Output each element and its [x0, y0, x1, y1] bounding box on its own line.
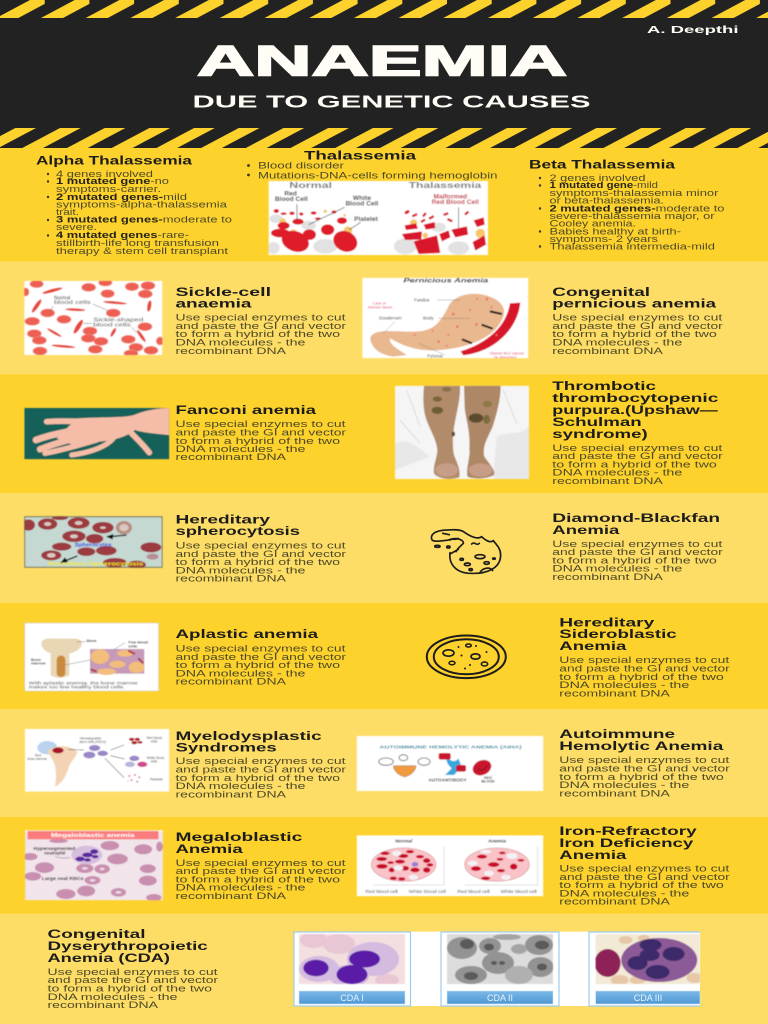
list: beta thalassemia: symptoms-thalassemia minor: [550, 188, 720, 199]
image: stomach diagram: Lack of: [373, 300, 387, 305]
bullet markers: [47, 173, 49, 237]
list: alpha thalassemia: 4 mutated genes -rare-: [56, 230, 189, 241]
text: description: and paste the GI and vector: [552, 321, 724, 332]
image: AIHA cartoon: RED: [484, 776, 492, 780]
heading: megaloblastic anemia: Anemia: [176, 844, 244, 856]
text: description: to form a hybrid of the two: [176, 773, 340, 784]
heading: thrombotic thrombocytopenic purpura: Schulman: [552, 417, 642, 429]
text: description: [559, 864, 731, 908]
image: megaloblastic smear: Large oval RBCs: [42, 876, 84, 881]
list: alpha thalassemia: stillbirth-life long transfusion: [56, 238, 219, 249]
panel: aplastic anemia: [24, 623, 347, 691]
panel: iron-refractory iron deficiency anemia: [357, 826, 731, 908]
band: row 6 background: [0, 817, 768, 914]
text: description: recombinant DNA: [176, 677, 287, 688]
card: CDA II: CDA II: [487, 993, 513, 1003]
image: normal vs anemia blood: Red blood cell: [365, 889, 398, 894]
text: description: to form a hybrid of the two: [176, 557, 340, 568]
gallery: CDA micrographs: [294, 932, 703, 1006]
text: description: and paste the GI and vector: [176, 321, 347, 332]
image: normal vs thalassemia blood cells: Thalassemia: [409, 180, 482, 190]
heading: congenital pernicious anemia: [552, 287, 717, 310]
bottom hazard stripes: [0, 128, 768, 148]
text: description: Use special enzymes to cut: [176, 858, 346, 869]
heading: sickle-cell anaemia: anaemia: [176, 298, 252, 310]
image: bone marrow diagram: Bone: [87, 638, 97, 643]
heading: autoimmune hemolytic anemia: Hemolytic Anemia: [559, 741, 724, 753]
heading: autoimmune hemolytic anemia: Autoimmune: [559, 729, 675, 741]
heading: megaloblastic anemia: [176, 832, 303, 856]
image: AIHA cartoon: BLOOD: [481, 779, 495, 783]
list: alpha thalassemia: [56, 169, 232, 257]
text: description: and paste the GI and vector: [552, 547, 724, 558]
image: megaloblastic smear: Hypersegmented: [34, 846, 76, 851]
card: CDA II: [441, 932, 559, 1006]
heading: hereditary sideroblastic anemia: Hereditary: [559, 618, 655, 630]
image: stomach diagram: Pernicious Anemia: [403, 277, 489, 284]
image: spherocytes micrograph: Spherocytes: [75, 543, 112, 549]
image: bone marrow diagram: Bone: [31, 657, 42, 662]
text: description: DNA molecules - the: [48, 992, 178, 1003]
text: description: recombinant DNA: [559, 688, 671, 699]
list: beta thalassemia: 2 genes involved: [550, 173, 646, 184]
image: hand: [24, 408, 169, 459]
text: description: to form a hybrid of the two: [48, 984, 212, 994]
text: description: [176, 540, 347, 585]
image: normal vs anemia blood: Red blood cell: [457, 889, 490, 894]
text: description: to form a hybrid of the two: [552, 555, 717, 566]
image: normal vs anemia blood: White blood cell: [409, 889, 446, 894]
list: beta thalassemia: symptoms- 2 years: [550, 234, 658, 245]
heading: iron-refractory iron deficiency anemia: Anemia: [559, 850, 627, 862]
text: description: and paste the GI and vector: [176, 549, 347, 560]
text: description: recombinant DNA: [559, 897, 671, 908]
card: CDA III: CDA III: [634, 993, 662, 1003]
band: row 3 background: [0, 493, 768, 603]
image: sickle cells: Sickle-shaped: [93, 318, 144, 324]
text: description: recombinant DNA: [559, 788, 671, 799]
text: description: to form a hybrid of the two: [176, 660, 340, 671]
text: description: [552, 539, 724, 583]
text: description: Use special enzymes to cut: [48, 967, 218, 978]
card: CDA III: [589, 932, 703, 1006]
text: description: Use special enzymes to cut: [559, 655, 730, 666]
image: AIHA cartoon: AUTOANTIBODY: [428, 777, 468, 782]
image: blood cell formation diagram: bone marrow: [27, 757, 47, 761]
text: description: DNA molecules - the: [559, 680, 689, 691]
text: description: [48, 967, 219, 1011]
heading: congenital pernicious anemia: pernicious anemia: [552, 298, 717, 310]
text: description: DNA molecules - the: [552, 338, 682, 348]
image: blood cell formation diagram: Red blood: [147, 736, 162, 740]
image: normal vs anemia blood: [357, 835, 543, 896]
image: blood cell formation diagram: stem cells (HSCs): [79, 740, 106, 744]
list: alpha thalassemia: severe.: [56, 222, 97, 233]
list: beta thalassemia: Thalassemia intermedia-mild: [550, 242, 715, 252]
heading: diamond-blackfan anemia: Anemia: [552, 525, 620, 537]
heading: thrombotic thrombocytopenic purpura: purpura.(Upshaw—: [552, 405, 718, 417]
heading: myelodysplastic syndromes: Syndromes: [176, 742, 277, 754]
band: thalassemia background: [0, 148, 768, 262]
text: description: DNA molecules - the: [176, 338, 306, 348]
list: beta thalassemia: Cooley anemia.: [550, 218, 636, 230]
image: blood cell formation diagram: White blood: [147, 756, 164, 760]
bullet markers: [539, 177, 541, 248]
heading: hereditary spherocytosis: [176, 514, 300, 538]
text: description: recombinant DNA: [176, 346, 287, 357]
panel: myelodysplastic syndromes: [25, 729, 347, 800]
author credit: A. Deepthi: [647, 24, 739, 36]
image: normal vs anemia blood: Anemia: [487, 838, 506, 844]
text: description: Use special enzymes to cut: [176, 756, 346, 767]
list: alpha thalassemia: 2 mutated genes- mild: [56, 192, 187, 203]
heading: alpha thalassemia: Alpha Thalassemia: [36, 156, 193, 168]
text: description: [176, 644, 347, 688]
heading: megaloblastic anemia: Megaloblastic: [176, 832, 303, 844]
image: normal vs thalassemia blood cells: Malformed: [433, 193, 467, 200]
image: stomach diagram: Body: [423, 316, 434, 321]
image: normal vs thalassemia blood cells: Platelet: [354, 216, 379, 223]
panel: thalassemia: [247, 150, 498, 256]
text: description: to form a hybrid of the two: [176, 436, 340, 447]
heading: thrombotic thrombocytopenic purpura: Thrombotic: [552, 381, 657, 393]
image: normal vs thalassemia blood cells: White: [353, 195, 371, 202]
list: alpha thalassemia: trait.: [56, 207, 79, 218]
image: spherocytes micrograph: Hereditary Spherocytosis: [48, 562, 143, 568]
panel: congenital pernicious anemia: [362, 277, 724, 359]
heading: hereditary spherocytosis: spherocytosis: [176, 526, 300, 538]
image: blood cell formation diagram: cells: [151, 759, 158, 763]
text: description: Use special enzymes to cut: [559, 755, 730, 766]
heading: iron-refractory iron deficiency anemia: [559, 826, 698, 862]
image: blood cell formation diagram: cells: [151, 739, 158, 743]
band: row 5 background: [0, 709, 768, 817]
image: normal vs anemia blood: White blood cell: [501, 889, 537, 894]
heading: hereditary sideroblastic anemia: Sideroblastic: [559, 629, 678, 641]
text: description: Use special enzymes to cut: [552, 312, 723, 324]
text: description: Use special enzymes to cut: [176, 312, 346, 324]
list: beta thalassemia: or beta-thalassemia.: [550, 196, 664, 206]
heading: myelodysplastic syndromes: Myelodysplastic: [176, 731, 323, 743]
list: thalassemia: Mutations-DNA-cells forming hemoglobin: [258, 170, 498, 182]
image: blood cell formation diagram: Platelets: [150, 777, 163, 781]
text: description: recombinant DNA: [552, 476, 664, 487]
band: row 7 background: [0, 914, 768, 1024]
text: description: DNA molecules - the: [559, 888, 689, 899]
panel: diamond-blackfan anemia: [431, 513, 724, 583]
image: stomach diagram: Fundus: [414, 298, 430, 303]
text: description: to form a hybrid of the two: [176, 874, 340, 885]
image: stomach diagram: Pylorus: [427, 353, 444, 358]
heading: hereditary sideroblastic anemia: [559, 618, 678, 653]
image: normal vs thalassemia blood cells: Red Blood Cell: [432, 199, 479, 206]
panel: thrombotic thrombocytopenic purpura: [395, 381, 724, 487]
text: description: [176, 419, 347, 463]
text: description: Use special enzymes to cut: [176, 540, 346, 552]
heading: aplastic anemia: Aplastic anemia: [176, 629, 319, 641]
list: alpha thalassemia: 4 genes involved: [56, 169, 153, 180]
list: beta thalassemia: 1 mutated gene -mild: [550, 180, 658, 191]
text: description: Use special enzymes to cut: [176, 644, 346, 654]
text: description: DNA molecules - the: [176, 668, 306, 679]
text: description: and paste the GI and vector: [559, 764, 731, 774]
image: normal vs thalassemia blood cells: Red: [284, 190, 297, 197]
text: description: and paste the GI and vector: [176, 652, 347, 663]
heading: thrombotic thrombocytopenic purpura: thrombocytopenic: [552, 393, 719, 405]
heading: beta thalassemia: Beta Thalassemia: [529, 160, 676, 172]
text: description: recombinant DNA: [552, 572, 664, 583]
text: description: and paste the GI and vector: [48, 975, 219, 986]
panel: autoimmune hemolytic anemia: [357, 729, 731, 799]
panel: congenital dyserythropoietic anemia: [48, 929, 703, 1011]
image: stomach diagram: be absorbed: [494, 354, 516, 359]
image: stomach diagram: [362, 277, 528, 359]
heading: iron-refractory iron deficiency anemia: Iron Deficiency: [559, 838, 694, 850]
image: normal vs thalassemia blood cells: [268, 180, 488, 256]
image: megaloblastic smear: Megaloblastic anemia: [51, 833, 136, 839]
band: row 4 background: [0, 603, 768, 709]
band: row 1 background: [0, 262, 768, 374]
text: description: recombinant DNA: [48, 1000, 159, 1011]
list: alpha thalassemia: symptoms-carrier.: [56, 184, 161, 195]
heading: autoimmune hemolytic anemia: [559, 729, 724, 753]
text: description: DNA molecules - the: [176, 781, 306, 792]
heading: congenital dyserythropoietic anemia: [48, 929, 209, 965]
image: megaloblastic smear: neutrophil: [44, 850, 65, 855]
text: description: DNA molecules - the: [176, 565, 306, 576]
text: description: to form a hybrid of the two: [559, 772, 724, 783]
list: beta thalassemia: Babies healthy at birth-: [550, 226, 681, 238]
band: row 2 background: [0, 374, 768, 493]
text: description: recombinant DNA: [176, 891, 287, 902]
text: description: and paste the GI and vector: [559, 664, 731, 674]
panel: beta thalassemia: [529, 160, 724, 252]
image: megaloblastic smear: [23, 830, 163, 901]
image: bone marrow diagram: marrow: [31, 661, 46, 666]
image: stomach diagram: Vitamin B12 cannot: [489, 351, 525, 356]
heading: myelodysplastic syndromes: [176, 731, 323, 754]
list: thalassemia: Blood disorder: [258, 160, 345, 172]
heading: sickle-cell anaemia: Sickle-cell: [176, 287, 271, 299]
heading: thrombotic thrombocytopenic purpura: syndrome): [552, 429, 648, 441]
list: alpha thalassemia: symptoms-alpha-thalassemia: [56, 200, 228, 210]
image: normal vs thalassemia blood cells: Normal: [289, 180, 332, 190]
text: description: DNA molecules - the: [176, 444, 306, 455]
heading: congenital dyserythropoietic anemia: Anemia (CDA): [48, 953, 170, 965]
text: description: DNA molecules - the: [559, 780, 689, 791]
text: description: recombinant DNA: [176, 574, 287, 585]
text: description: Use special enzymes to cut: [176, 419, 346, 430]
text: description: [176, 858, 347, 902]
icon: ruptured cell: [431, 530, 501, 573]
image: bone marrow diagram: cells: [128, 643, 138, 648]
heading: congenital dyserythropoietic anemia: Dyserythropoietic: [48, 941, 209, 953]
image: stomach diagram: intrinsic factor: [368, 304, 393, 309]
heading: congenital pernicious anemia: Congenital: [552, 287, 650, 299]
text: description: and paste the GI and vector: [176, 428, 347, 438]
text: description: DNA molecules - the: [176, 883, 306, 894]
text: description: and paste the GI and vector: [559, 872, 731, 883]
image: blood cell formation diagram: [25, 729, 169, 792]
image: sickle cells: [23, 279, 164, 357]
text: description: [559, 755, 731, 799]
list: beta thalassemia: severe-thalassemia major, or: [550, 211, 716, 222]
image: sickle cells: Normal: [54, 295, 70, 301]
text: description: Use special enzymes to cut: [552, 539, 723, 550]
heading: thalassemia: Thalassemia: [304, 150, 417, 162]
list: alpha thalassemia: 1 mutated gene -no: [56, 176, 169, 187]
list: thalassemia: [247, 160, 498, 182]
text: description: Use special enzymes to cut: [552, 443, 723, 454]
heading: sickle-cell anaemia: [176, 287, 271, 310]
panel: hereditary sideroblastic anemia: [427, 618, 731, 699]
image: bone marrow diagram: makes too few healthy blood cells.: [29, 685, 125, 690]
heading: diamond-blackfan anemia: [552, 513, 720, 537]
image: normal vs anemia blood: Normal: [395, 838, 413, 844]
image: AIHA cartoon: [357, 736, 543, 791]
text: description: Use special enzymes to cut: [559, 864, 730, 874]
heading: iron-refractory iron deficiency anemia: Iron-Refractory: [559, 826, 698, 838]
top hazard stripes: [0, 0, 768, 18]
title: ANAEMIA: [197, 38, 567, 86]
text: description: recombinant DNA: [176, 452, 287, 463]
list: alpha thalassemia: therapy & stem cell transplant: [56, 246, 228, 257]
list: alpha thalassemia: 3 mutated genes- moderate to: [56, 214, 232, 226]
panel: alpha thalassemia: [36, 156, 232, 257]
card: CDA I: [294, 932, 410, 1006]
text: description: [176, 312, 347, 357]
panel: hereditary spherocytosis: [22, 514, 347, 585]
text: description: to form a hybrid of the two: [552, 459, 717, 470]
image: bone marrow diagram: Few blood: [128, 640, 149, 645]
text: description: recombinant DNA: [552, 346, 664, 357]
list: beta thalassemia: 2 mutated genes- moderate to: [550, 204, 724, 214]
heading: diamond-blackfan anemia: Diamond-Blackfan: [552, 513, 720, 525]
card: CDA I: CDA I: [340, 993, 364, 1003]
text: description: DNA molecules - the: [552, 564, 682, 575]
text: description: to form a hybrid of the two: [552, 329, 717, 340]
text: description: and paste the GI and vector: [176, 764, 347, 776]
heading: hereditary sideroblastic anemia: Anemia: [559, 641, 627, 653]
image: bruised legs: [395, 386, 529, 479]
image: bone marrow diagram: [24, 623, 159, 691]
text: description: [552, 312, 724, 357]
panel: megaloblastic anemia: [23, 830, 347, 902]
heading: hereditary spherocytosis: Hereditary: [176, 514, 271, 526]
list: beta thalassemia: [550, 173, 724, 252]
image: sickle cells: blood cells: [93, 322, 131, 328]
image: blood cell formation diagram: Hematopoietic: [80, 737, 102, 741]
text: description: to form a hybrid of the two: [559, 880, 724, 891]
panel: sickle-cell anaemia: [23, 279, 347, 357]
heading: thrombotic thrombocytopenic purpura: [552, 381, 719, 441]
text: description: [176, 756, 347, 800]
text: description: and paste the GI and vector: [552, 451, 724, 462]
image: stomach diagram: Duodenum: [379, 316, 402, 321]
image: bone marrow diagram: With aplastic anemia, the bone marrow: [29, 681, 138, 686]
image: AIHA cartoon: AUTOIMMUNE HEMOLYTIC ANEMIA (AIHA): [379, 745, 522, 751]
heading: congenital dyserythropoietic anemia: Congenital: [48, 929, 146, 941]
image: sickle cells: blood cells: [54, 300, 91, 306]
text: description: to form a hybrid of the two: [176, 329, 340, 340]
image: normal vs thalassemia blood cells: Blood Cell: [275, 196, 308, 203]
image: normal vs thalassemia blood cells: Blood Cell: [346, 201, 379, 208]
text: description: recombinant DNA: [176, 789, 287, 800]
text: description: [559, 655, 731, 699]
text: description: DNA molecules - the: [552, 468, 682, 479]
heading: fanconi anemia: Fanconi anemia: [176, 405, 317, 417]
text: description: and paste the GI and vector: [176, 866, 347, 877]
image: blood cell formation diagram: Red: [35, 754, 41, 758]
image: spherocytes micrograph: [22, 516, 163, 569]
text: description: [552, 443, 724, 487]
band: header background: [0, 0, 768, 148]
icon: petri dish: [427, 636, 506, 678]
text: description: to form a hybrid of the two: [559, 672, 724, 683]
panel: fanconi anemia: [24, 405, 347, 463]
subtitle: DUE TO GENETIC CAUSES: [192, 92, 590, 112]
